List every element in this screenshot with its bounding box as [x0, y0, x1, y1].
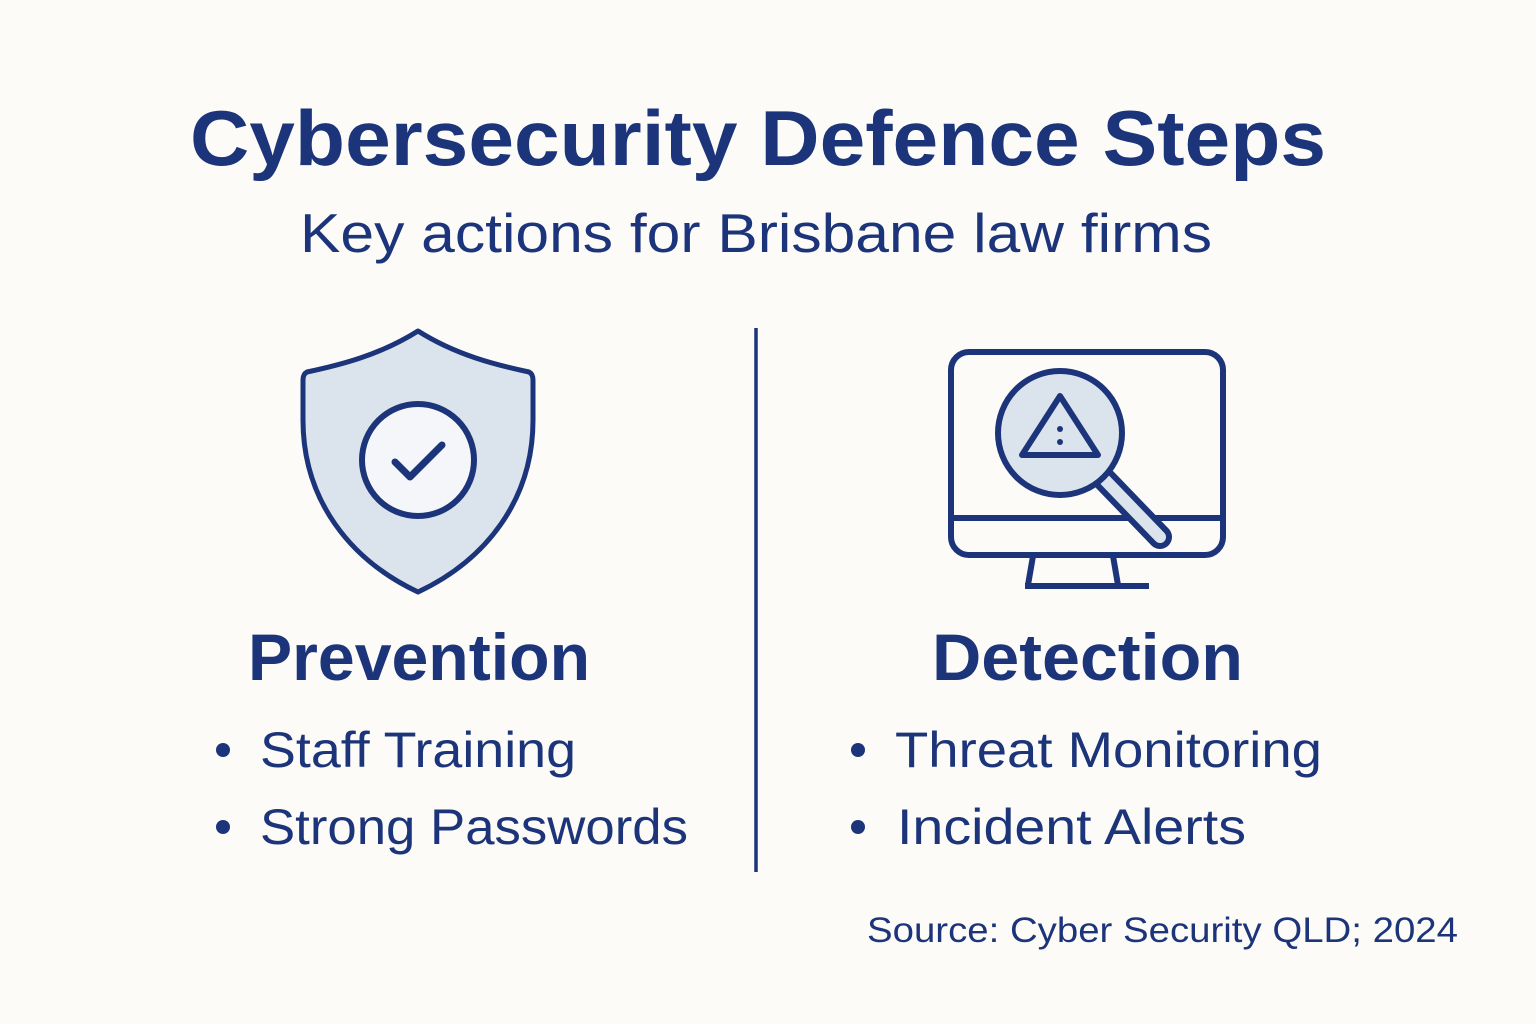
list: detection items [851, 722, 1322, 855]
list: prevention items [216, 722, 688, 855]
list: prevention items: Strong Passwords [260, 799, 688, 855]
heading: detection: Detection [932, 620, 1243, 694]
icon: monitor with magnifier [951, 352, 1223, 586]
list: prevention items: Staff Training [260, 722, 576, 778]
title: Cybersecurity Defence Steps [190, 94, 1326, 182]
heading: prevention: Prevention [248, 620, 590, 694]
panel: detection [851, 352, 1322, 855]
list: detection items: Incident Alerts [897, 799, 1246, 855]
subtitle: Key actions for Brisbane law firms [300, 202, 1212, 264]
panel: prevention [216, 331, 688, 855]
list: detection items: Threat Monitoring [895, 722, 1322, 778]
icon: shield [303, 331, 533, 592]
source note: Source: Cyber Security QLD; 2024 [867, 911, 1458, 950]
divider [754, 328, 758, 872]
